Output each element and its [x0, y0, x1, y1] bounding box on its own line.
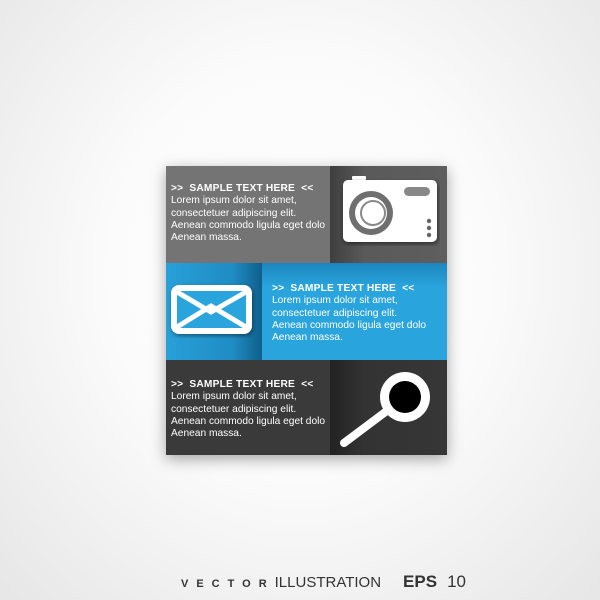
panel: middle text — [262, 263, 447, 360]
text block: top — [171, 183, 325, 243]
text block: bottom: consectetuer adipiscing elit. — [171, 404, 296, 415]
text block: bottom — [171, 379, 325, 439]
text block: top: >> SAMPLE TEXT HERE << — [171, 183, 313, 194]
text block: middle: >> SAMPLE TEXT HERE << — [272, 283, 414, 294]
footer caption: VECTORILLUSTRATION EPS 10 — [181, 572, 466, 591]
text block: bottom: Lorem ipsum dolor sit amet, — [171, 391, 297, 402]
text block: top: Aenean massa. — [171, 232, 242, 243]
text block: bottom: Aenean massa. — [171, 428, 242, 439]
panel: magnifier tile — [330, 360, 447, 455]
text block: top: consectetuer adipiscing elit. — [171, 208, 296, 219]
text block: bottom: Aenean commodo ligula eget dolo — [171, 416, 325, 427]
text block: middle: Aenean commodo ligula eget dolo — [272, 320, 426, 331]
panel: top text — [166, 166, 330, 263]
panel: infographic square — [166, 166, 447, 455]
text block: middle: Aenean massa. — [272, 332, 343, 343]
panel: camera tile — [330, 166, 447, 263]
text block: middle: consectetuer adipiscing elit. — [272, 308, 397, 319]
icon: envelope — [169, 284, 256, 338]
text block: bottom: >> SAMPLE TEXT HERE << — [171, 379, 313, 390]
text block: middle — [272, 283, 426, 343]
panel: bottom text — [166, 360, 330, 455]
icon: camera — [342, 176, 440, 246]
panel: envelope tile — [166, 263, 262, 360]
text block: top: Lorem ipsum dolor sit amet, — [171, 195, 297, 206]
icon: magnifier — [340, 372, 430, 447]
text block: top: Aenean commodo ligula eget dolo — [171, 220, 325, 231]
text block: middle: Lorem ipsum dolor sit amet, — [272, 295, 398, 306]
